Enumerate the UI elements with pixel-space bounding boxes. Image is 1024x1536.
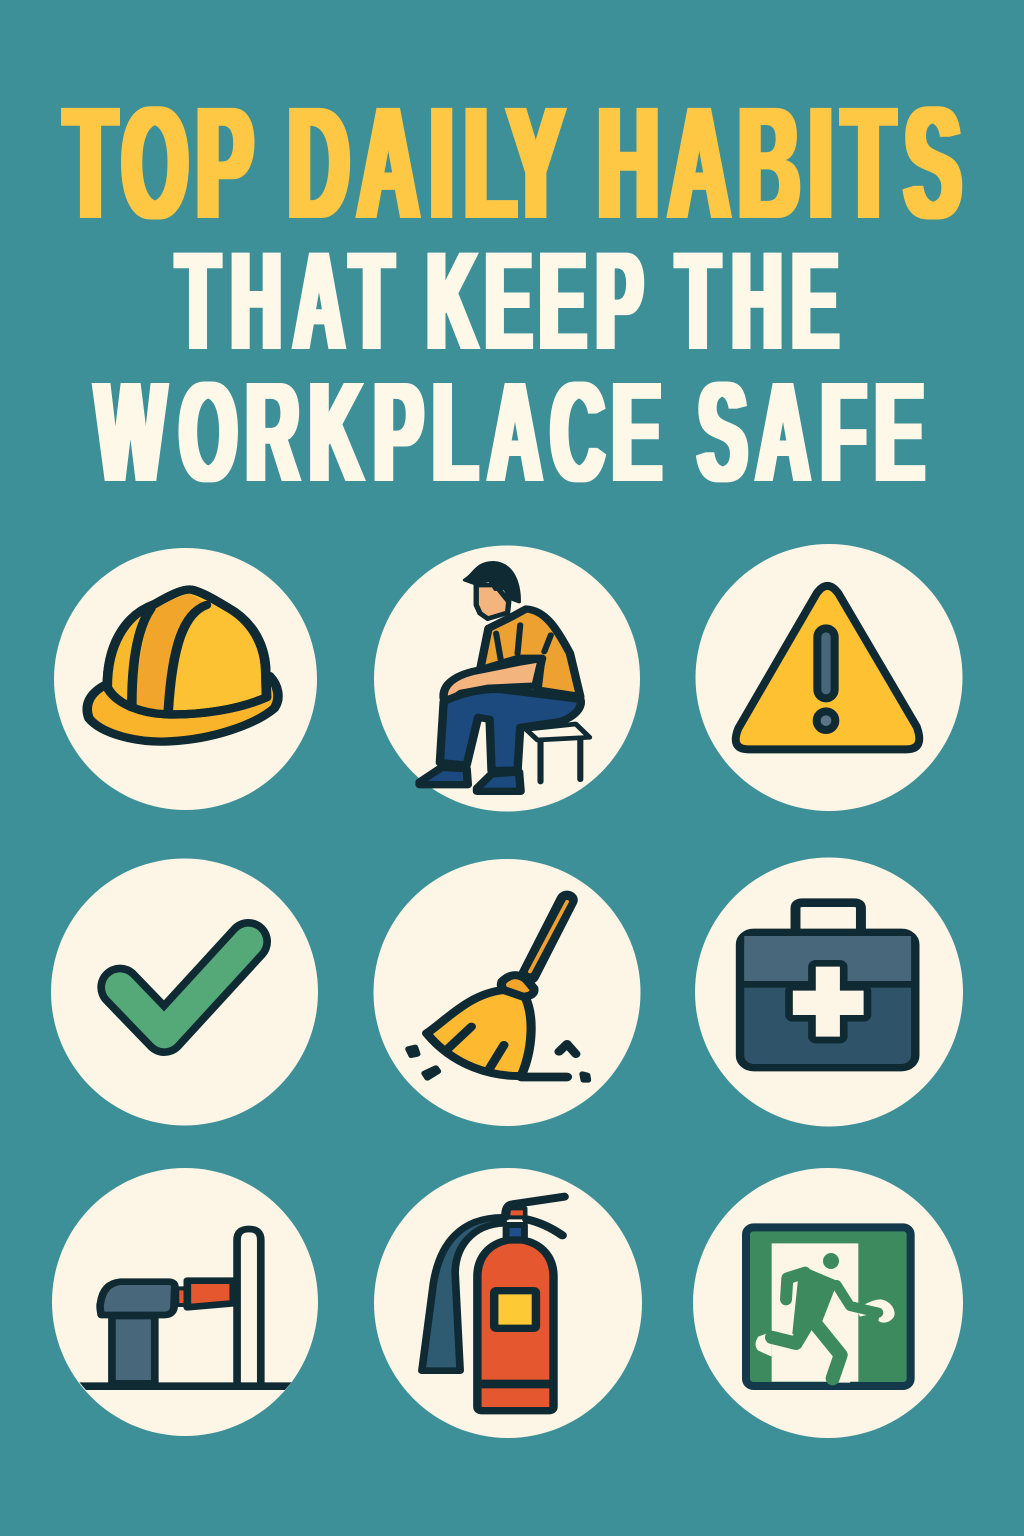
icon: broom — [374, 859, 640, 1126]
icon: fire extinguisher — [374, 1168, 642, 1438]
icon: emergency exit sign — [693, 1168, 963, 1438]
heading line: that keep the — [177, 224, 838, 379]
heading line: top daily habits: HABITS — [598, 74, 961, 253]
heading line: workplace safe — [96, 353, 924, 512]
heading line: top daily habits: TOP — [65, 74, 253, 253]
heading line: that keep the: KEEP — [427, 224, 643, 379]
icon: first aid kit — [695, 858, 963, 1126]
heading line: workplace safe: WORKPLACE — [96, 353, 661, 512]
icon: hard hat — [54, 548, 317, 810]
icon: machine guard — [52, 1168, 318, 1436]
icon: warning triangle — [696, 544, 962, 811]
heading line: top daily habits — [65, 74, 961, 253]
icon: seated worker — [374, 546, 640, 812]
heading line: that keep the: THAT — [177, 224, 393, 379]
heading line: that keep the: THE — [677, 224, 838, 379]
icon: check mark — [51, 858, 318, 1126]
heading line: workplace safe: SAFE — [698, 353, 924, 512]
title — [65, 74, 961, 512]
heading line: top daily habits: DAILY — [288, 74, 564, 253]
